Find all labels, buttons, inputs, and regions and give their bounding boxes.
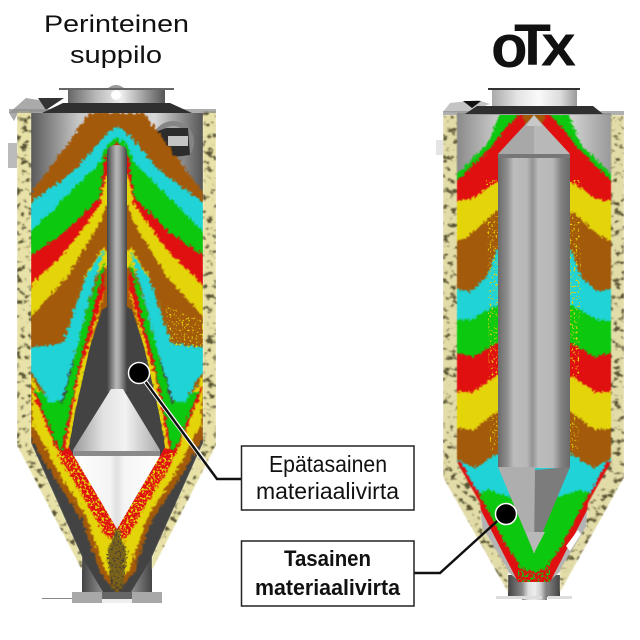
motor housing (152, 121, 194, 163)
central pipe (107, 145, 127, 392)
callout: even material flow (242, 541, 414, 606)
outlet pipes (496, 575, 572, 600)
lid (42, 103, 192, 113)
top caps (443, 111, 624, 115)
interior base (456, 115, 612, 582)
base flange (42, 592, 162, 603)
inlet collar (68, 89, 165, 103)
column top band (498, 154, 570, 158)
top cone (498, 115, 570, 154)
logo: OTX: o (491, 13, 528, 80)
top caps (9, 109, 216, 113)
callout: uneven material flow: Epätasainen (269, 451, 387, 477)
inlet collar (492, 90, 577, 106)
upper gray interior (31, 113, 203, 208)
callout: uneven material flow (242, 446, 414, 510)
title: traditional hopper: suppilo (70, 42, 162, 69)
title: traditional hopper: Perinteinen (44, 11, 189, 38)
inlet flange (59, 88, 174, 90)
logo: OTX: T (514, 13, 551, 78)
callout leader: even flow (414, 504, 516, 573)
cone ring (73, 451, 160, 456)
callout: uneven material flow: materiaalivirta (256, 478, 399, 504)
callout: even material flow: Tasainen (284, 546, 371, 571)
lid (465, 106, 603, 114)
lower cone (74, 456, 160, 529)
insulation wall (17, 111, 216, 570)
panel: traditional hopper cross-section (8, 85, 216, 603)
gray side wedges (480, 503, 588, 580)
callout: even material flow: materiaalivirta (255, 575, 401, 600)
logo: OTX: X (542, 26, 575, 75)
layered material flow (26, 113, 208, 592)
side slot (566, 530, 581, 551)
mottled mix at bottom (518, 560, 550, 582)
callout leader: uneven flow (128, 362, 241, 479)
inner dark void (69, 300, 165, 456)
central column (498, 154, 570, 468)
inlet port (108, 85, 124, 100)
layered material flow (454, 113, 614, 590)
mottled yellow particles in lower brown bands (165, 305, 203, 350)
lower outlet cylinder (82, 550, 152, 594)
title: traditional hopper (44, 11, 189, 69)
upper cone (73, 389, 160, 455)
left bracket (436, 100, 490, 155)
hopper interior (31, 113, 203, 592)
upper gray interior (457, 113, 611, 193)
insulation wall (443, 115, 624, 592)
mottled dark particles in throat (106, 530, 128, 590)
mottled yellow particles along column (486, 180, 582, 450)
lower cone (498, 467, 570, 553)
mottled yellow particles in funnel (55, 450, 179, 585)
panel: OTX hopper cross-section (436, 88, 624, 600)
logo: OTX (491, 13, 575, 80)
left external bracket (8, 98, 64, 168)
inlet flange (488, 88, 580, 90)
